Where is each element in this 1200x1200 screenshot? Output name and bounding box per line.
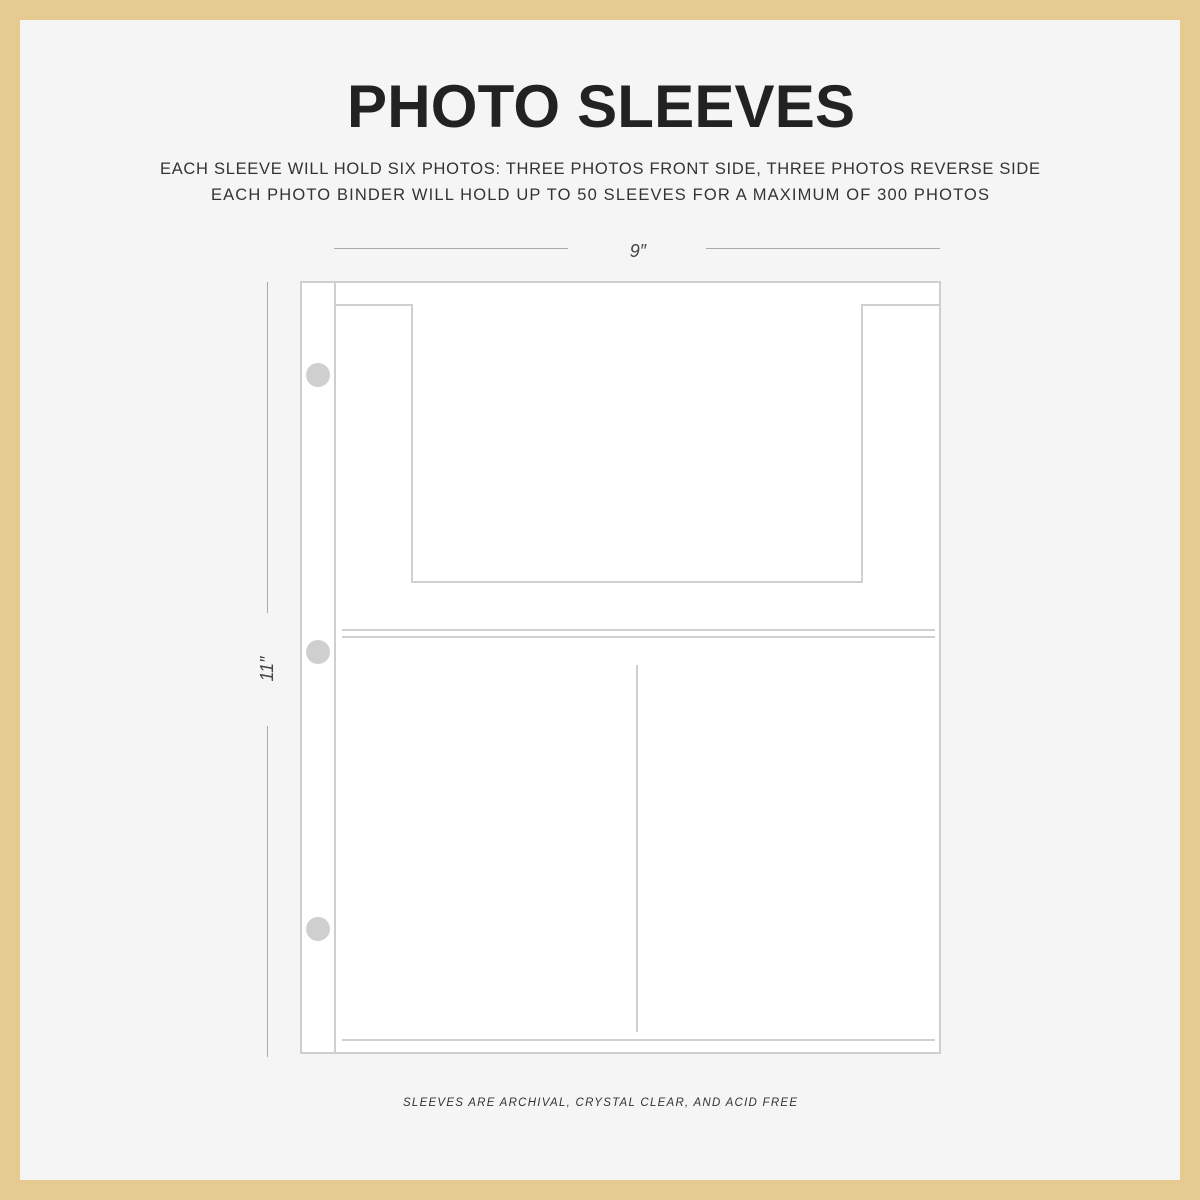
binder strip (334, 282, 336, 1053)
top pocket (335, 305, 940, 582)
dimension: width 9 inches: 9″ (630, 241, 647, 261)
binder holes (306, 363, 330, 941)
divider lines (342, 629, 935, 631)
sleeve (301, 282, 940, 1053)
subtitle text (160, 160, 1040, 204)
title: PHOTO SLEEVES (347, 73, 855, 140)
footer note: SLEEVES ARE ARCHIVAL, CRYSTAL CLEAR, AND ACID FREE (403, 1097, 797, 1109)
dimension: height 11 inches: 11″ (257, 656, 277, 682)
subtitle text: EACH SLEEVE WILL HOLD SIX PHOTOS: THREE PHOTOS FRONT SIDE, THREE PHOTOS REVERSE SIDE (160, 160, 1040, 178)
bottom pockets divider (636, 665, 638, 1032)
subtitle text: EACH PHOTO BINDER WILL HOLD UP TO 50 SLEEVES FOR A MAXIMUM OF 300 PHOTOS (211, 186, 989, 204)
